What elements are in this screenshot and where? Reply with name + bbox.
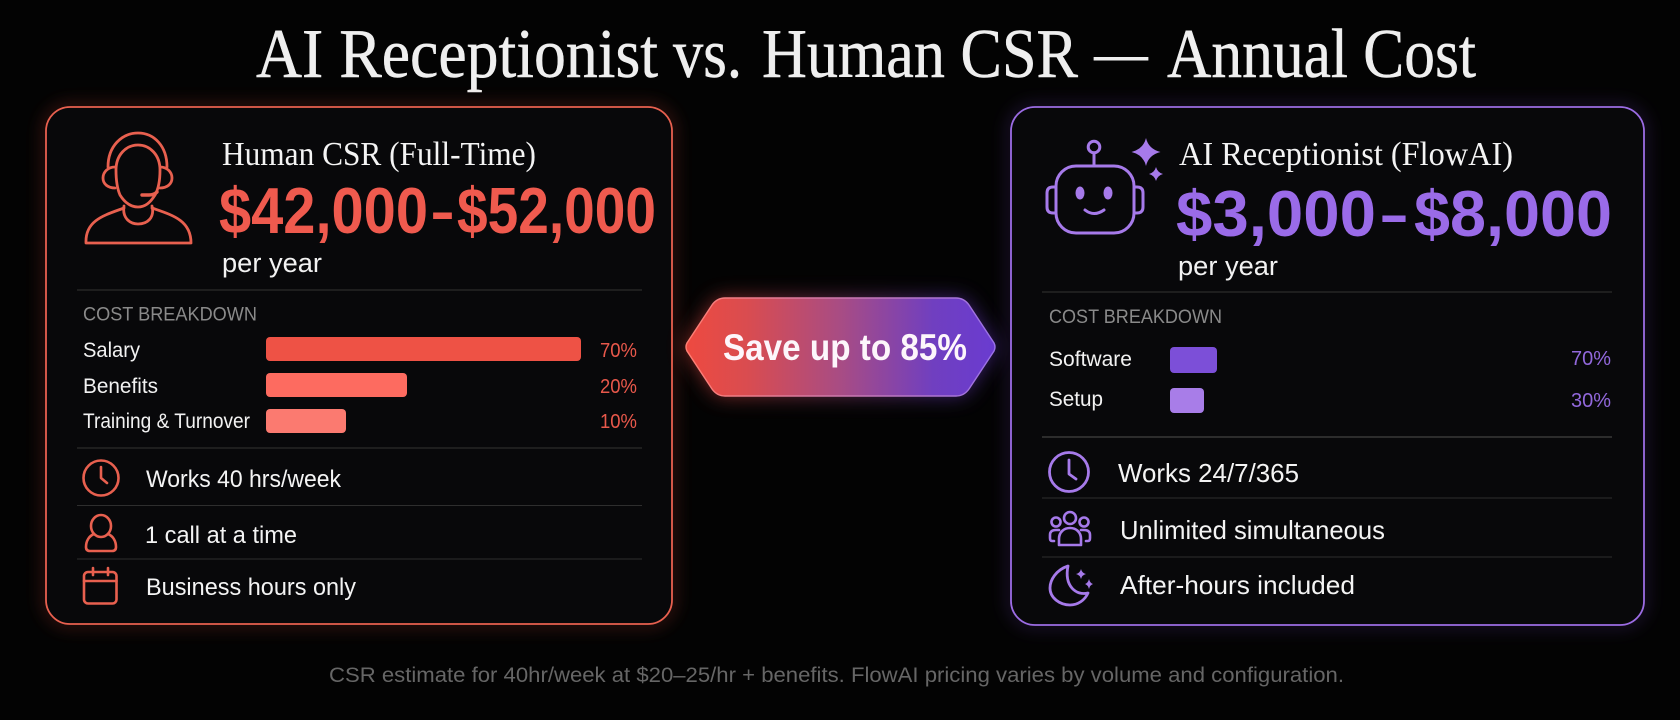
title: Annual Cost	[1167, 16, 1476, 93]
bar: benefits: Benefits	[83, 375, 158, 398]
bar: benefits	[83, 373, 637, 398]
price: AI receptionist: –	[1381, 177, 1407, 250]
title: —	[1093, 14, 1149, 91]
heading: cost breakdown: COST BREAKDOWN	[83, 304, 257, 326]
price: human CSR	[219, 174, 656, 247]
price: human CSR: $52,000	[457, 174, 656, 247]
bar: software: Software	[1049, 347, 1132, 371]
feature: after-hours included	[1050, 566, 1355, 605]
feature: one call at a time	[86, 515, 297, 551]
feature: after-hours included: After-hours included	[1120, 570, 1355, 600]
badge: save up to 85%	[686, 298, 995, 396]
feature: business hours only: Business hours only	[146, 574, 357, 601]
feature: works 24/7/365: Works 24/7/365	[1118, 458, 1299, 488]
bar: salary: 70%	[600, 340, 637, 362]
heading: cost breakdown: COST BREAKDOWN	[1049, 306, 1222, 328]
bar: setup	[1049, 387, 1611, 413]
bar: training and turnover: 10%	[600, 411, 637, 433]
bar: training and turnover	[83, 409, 637, 433]
badge: save up to 85%: Save up to 85%	[723, 327, 967, 368]
bar: training and turnover: Training & Turnover	[83, 410, 250, 433]
bar: salary	[83, 337, 637, 362]
bar: salary: Salary	[83, 339, 140, 362]
heading: AI receptionist: AI Receptionist (FlowAI)	[1179, 136, 1513, 173]
feature: unlimited simultaneous: Unlimited simultaneous	[1120, 515, 1385, 545]
title: AI Receptionist	[256, 16, 658, 93]
price: human CSR: –	[432, 174, 453, 247]
bar: benefits: 20%	[600, 376, 637, 398]
title	[256, 14, 1476, 93]
price: AI receptionist: $8,000	[1414, 177, 1612, 250]
per year label: per year	[1178, 251, 1278, 281]
bar: software: 70%	[1571, 348, 1611, 370]
panel: human CSR	[46, 107, 672, 624]
panel: AI receptionist	[1011, 107, 1644, 625]
price: AI receptionist	[1176, 177, 1612, 250]
title: Human CSR	[762, 16, 1078, 93]
feature: works 40 hrs: Works 40 hrs/week	[146, 466, 342, 493]
icon: robot with sparkles	[1047, 138, 1163, 233]
bar: software	[1049, 347, 1611, 373]
price: human CSR: $42,000	[219, 174, 428, 247]
feature: business hours only	[84, 568, 357, 604]
feature: one call at a time: 1 call at a time	[145, 522, 297, 549]
heading: human CSR: Human CSR (Full-Time)	[222, 136, 536, 173]
bar chart: human cost	[83, 337, 637, 433]
title: vs.	[673, 16, 742, 93]
per year label: per year	[222, 248, 322, 278]
feature: works 40 hrs	[84, 460, 342, 496]
icon: headset agent	[86, 133, 191, 243]
bar: setup: 30%	[1571, 390, 1611, 412]
feature: works 24/7/365	[1050, 452, 1299, 492]
price: AI receptionist: $3,000	[1176, 177, 1376, 250]
bar: setup: Setup	[1049, 387, 1103, 411]
footnote: CSR estimate for 40hr/week at $20–25/hr + benefits. FlowAI pricing varies by volume and configuration.	[329, 664, 1344, 687]
bar chart: AI cost	[1049, 347, 1611, 413]
